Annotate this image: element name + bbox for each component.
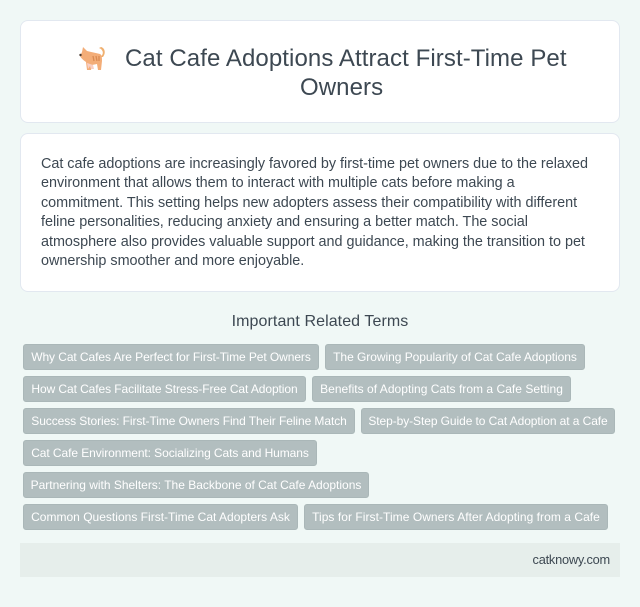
tag [312,376,571,402]
tag [361,408,615,434]
title: Owners [300,74,383,101]
tag: Why Cat Cafes Are Perfect for First-Time Pet Owners [31,350,311,364]
description text: environment that allows them to interact with multiple cats before making a [41,175,515,191]
footer site name: catknowy.com [533,552,610,567]
description text: Cat cafe adoptions are increasingly favored by first-time pet owners due to the relaxed [41,156,588,172]
footer [20,543,620,577]
title [125,45,567,101]
tag list [23,344,615,530]
tag: Cat Cafe Environment: Socializing Cats and Humans [31,446,309,460]
tag: Success Stories: First-Time Owners Find Their Feline Match [31,414,347,428]
description text: atmosphere also provides valuable support and guidance, making the transition to pet [41,234,585,250]
description text: feline personalities, reducing anxiety and ensuring a better match. The social [41,214,528,230]
tag [23,344,319,370]
icon: cat [79,47,105,70]
panel: title card [20,20,620,123]
tag: The Growing Popularity of Cat Cafe Adoptions [333,350,577,364]
tag: How Cat Cafes Facilitate Stress-Free Cat Adoption [31,382,298,396]
heading: related terms: Important Related Terms [232,313,408,330]
panel: description [20,133,620,292]
tag [325,344,585,370]
tag [23,408,355,434]
description text [41,156,588,269]
tag [304,504,608,530]
tag [23,504,298,530]
tag: Tips for First-Time Owners After Adopting from a Cafe [312,510,600,524]
tag [23,440,317,466]
tag: Partnering with Shelters: The Backbone of Cat Cafe Adoptions [31,478,361,492]
description text: commitment. This setting helps new adopters assess their compatibility with different [41,195,577,211]
description text: ownership smoother and more enjoyable. [41,253,304,269]
tag: Common Questions First-Time Cat Adopters Ask [31,510,290,524]
tag: Benefits of Adopting Cats from a Cafe Setting [320,382,563,396]
tag [23,376,306,402]
title: Cat Cafe Adoptions Attract First-Time Pet [125,45,567,72]
tag: Step-by-Step Guide to Cat Adoption at a Cafe [368,414,608,428]
tag [23,472,369,498]
